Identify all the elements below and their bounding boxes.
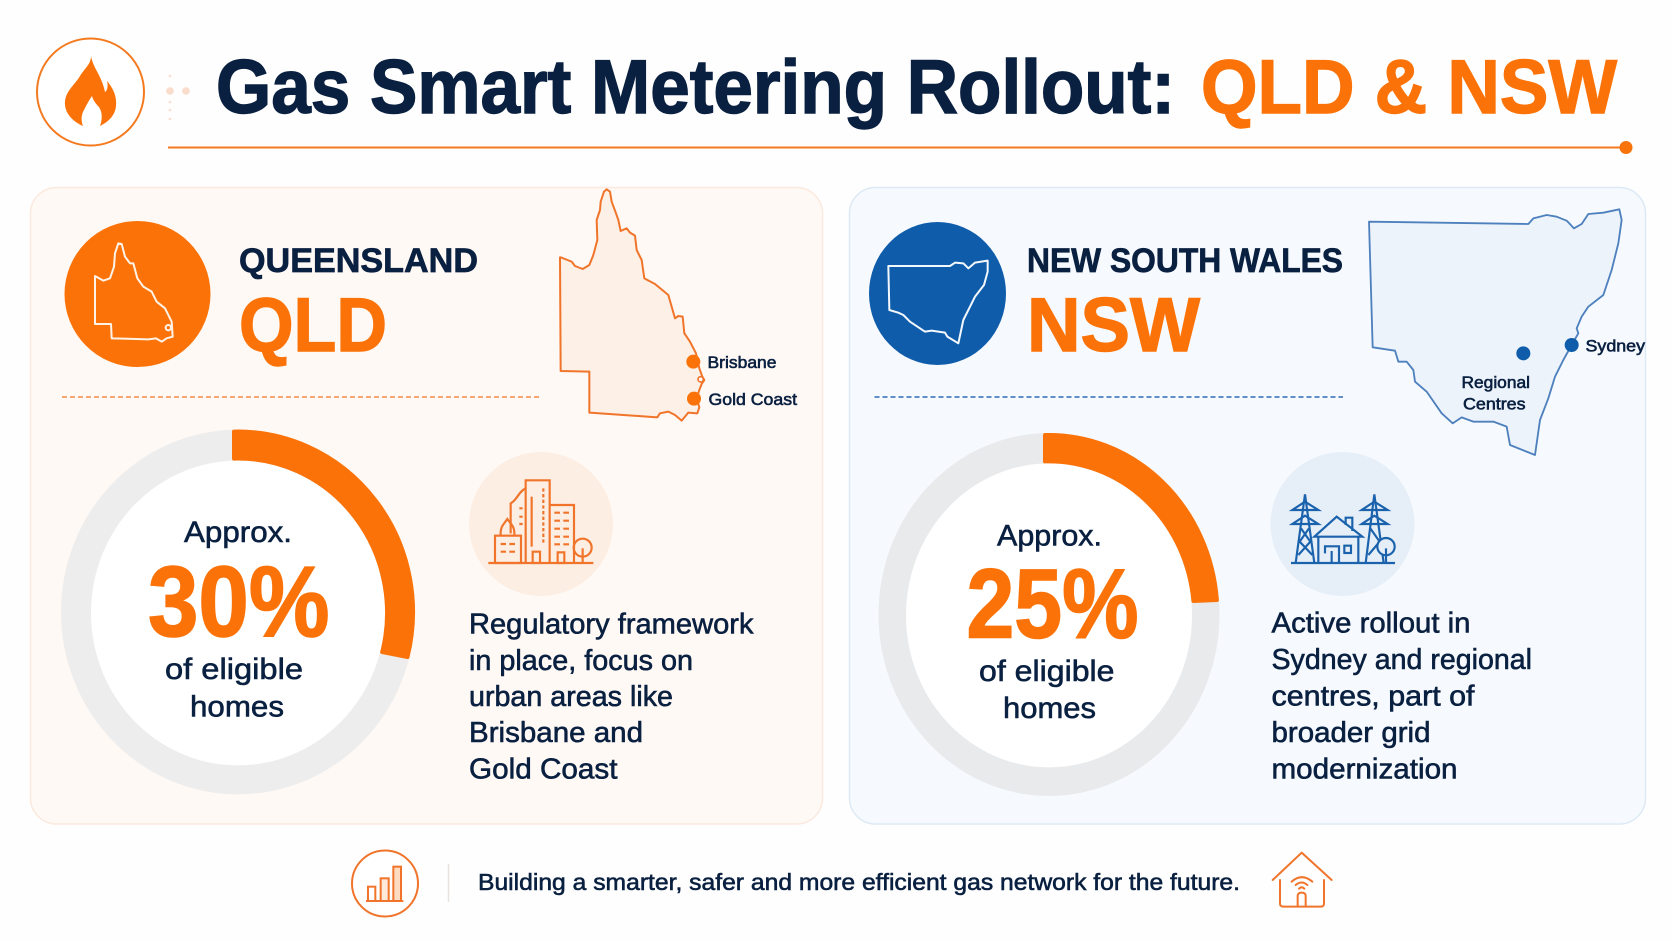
description: New South Wales: modernization — [1272, 754, 1458, 786]
heading: New South Wales: NEW SOUTH WALES — [1027, 242, 1343, 280]
icon: bar chart in circle — [352, 850, 418, 916]
donut chart: 25% — [878, 433, 1220, 796]
heading: Queensland: QUEENSLAND — [239, 242, 478, 280]
description: New South Wales: Sydney and regional — [1272, 644, 1532, 676]
donut value: 25%: 25% — [966, 548, 1138, 658]
map: Queensland with cities — [560, 189, 797, 421]
description: New South Wales: centres, part of — [1272, 680, 1475, 712]
map: New South Wales with cities: Regional — [1462, 373, 1530, 392]
description: Queensland: in place, focus on — [469, 645, 693, 677]
icon: pylons and house — [1270, 452, 1414, 596]
panel: Queensland — [30, 188, 822, 824]
map: New South Wales with cities: Sydney — [1586, 336, 1646, 356]
donut value: 30%: 30% — [148, 546, 330, 658]
footer text: Building a smarter, safer and more efficient gas network for the future. — [478, 869, 1240, 895]
description: Queensland: urban areas like — [469, 681, 673, 713]
description: Queensland: Brisbane and — [469, 717, 643, 749]
donut caption: of eligible — [165, 653, 303, 686]
description: New South Wales: Active rollout in — [1272, 608, 1470, 640]
map: Queensland with cities: Brisbane — [708, 353, 776, 372]
footer — [352, 850, 1332, 916]
description: Queensland — [469, 608, 754, 786]
donut chart: 30% — [61, 430, 415, 794]
donut label: Approx.: Approx. — [997, 520, 1102, 552]
donut caption: of eligible — [979, 655, 1114, 688]
icon: flame in circle — [37, 38, 144, 146]
heading: QLD: QLD — [239, 283, 387, 368]
title underline with dot — [168, 141, 1632, 154]
icon: Queensland badge — [64, 221, 210, 367]
panel: New South Wales — [850, 188, 1646, 824]
donut caption: homes — [1003, 692, 1096, 725]
donut caption — [165, 653, 303, 724]
title: Gas Smart Metering Rollout: — [216, 45, 1175, 130]
map: New South Wales with cities — [1369, 209, 1646, 455]
heading: NSW: NSW — [1027, 283, 1200, 368]
description: New South Wales — [1272, 608, 1532, 786]
icon: New South Wales badge — [869, 222, 1006, 365]
icon: smart home — [1273, 853, 1332, 907]
donut caption — [979, 655, 1114, 725]
description: Queensland: Regulatory framework — [469, 608, 754, 640]
title: QLD & NSW — [1201, 45, 1617, 130]
donut caption: homes — [190, 690, 284, 724]
icon: city buildings — [469, 452, 613, 596]
description: New South Wales: broader grid — [1272, 717, 1430, 749]
map: Queensland with cities: Gold Coast — [708, 390, 797, 409]
donut label: Approx.: Approx. — [184, 516, 292, 549]
description: Queensland: Gold Coast — [469, 754, 618, 786]
map: New South Wales with cities: Centres — [1463, 394, 1526, 414]
